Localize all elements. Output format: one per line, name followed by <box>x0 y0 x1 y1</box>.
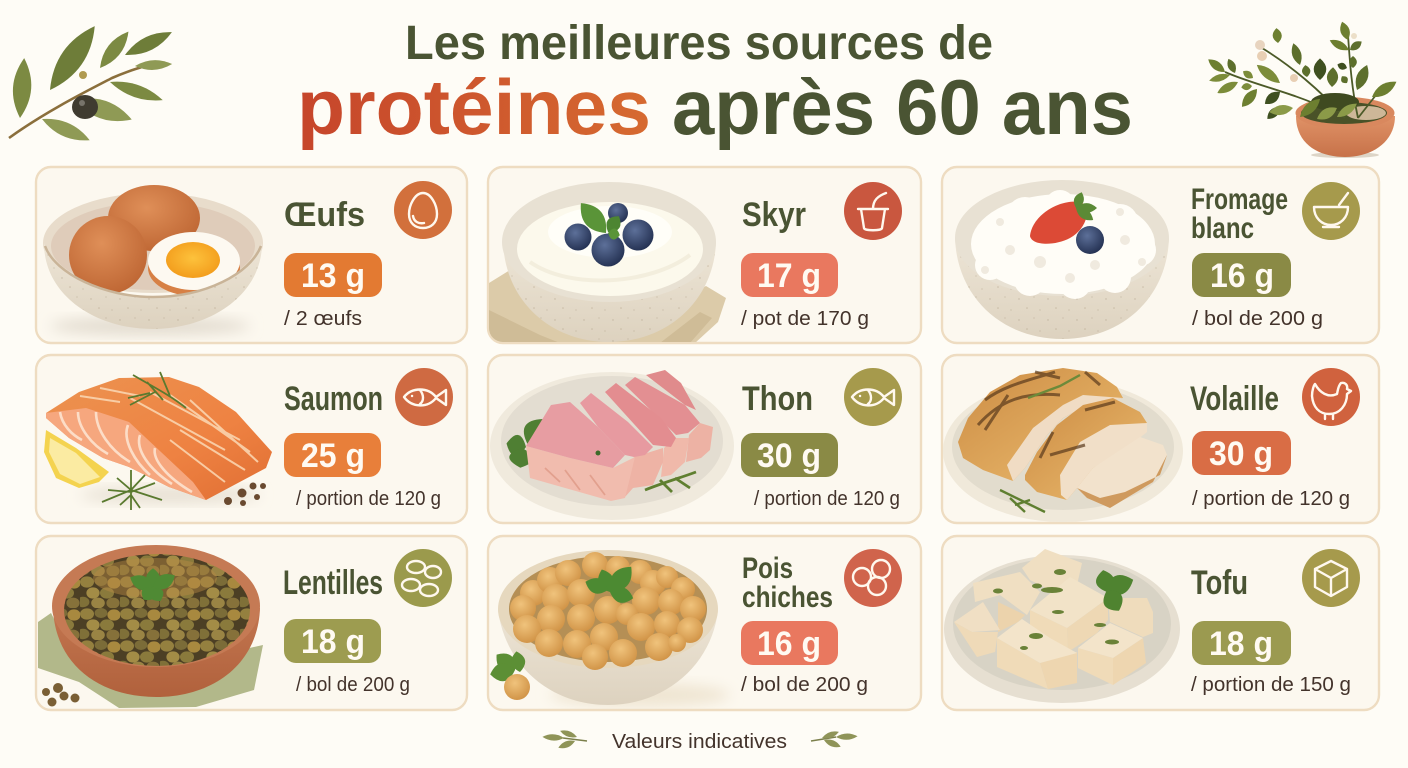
title <box>297 17 1133 151</box>
icon: right sprig <box>811 729 858 750</box>
icon: lentils <box>394 549 452 607</box>
icon: chickpeas <box>844 549 902 607</box>
icon: left sprig <box>542 728 587 751</box>
protein value <box>284 253 382 297</box>
name: blanc <box>1191 212 1254 245</box>
note text: Valeurs indicatives <box>612 731 787 753</box>
name: chiches <box>742 581 833 614</box>
protein value: 17 g <box>757 257 821 295</box>
panel: fromage blanc <box>942 167 1379 343</box>
icon: fish <box>844 368 902 426</box>
icon: bowl <box>1302 182 1360 240</box>
serving: / bol de 200 g <box>741 674 868 696</box>
panel: lentilles <box>36 536 467 710</box>
protein value: 13 g <box>301 257 365 295</box>
serving: / portion de 120 g <box>1192 488 1350 510</box>
icon: potted herb <box>1206 20 1399 158</box>
protein value: 30 g <box>757 437 821 475</box>
panel: thon <box>488 355 921 523</box>
protein value: 18 g <box>1209 625 1273 663</box>
protein value <box>1192 621 1291 665</box>
panel: skyr <box>488 167 921 343</box>
protein value: 16 g <box>1210 257 1274 295</box>
panel: pois chiches <box>488 536 921 710</box>
icon: fish <box>395 368 453 426</box>
protein value: 30 g <box>1209 435 1273 473</box>
parsley garnish <box>505 413 553 469</box>
protein value <box>741 433 838 477</box>
title word: protéines: protéines <box>297 63 651 151</box>
serving: / bol de 200 g <box>296 674 410 696</box>
protein value <box>284 619 381 663</box>
name: Pois <box>742 552 793 585</box>
protein value: 25 g <box>301 437 365 475</box>
name: Tofu <box>1191 564 1248 602</box>
icon: tofu cube <box>1302 549 1360 607</box>
illustration: eggs in bowl <box>43 185 263 335</box>
serving: / portion de 150 g <box>1191 674 1351 696</box>
name: Thon <box>742 380 813 418</box>
footer note <box>542 728 858 753</box>
protein value <box>1192 253 1291 297</box>
serving: / bol de 200 g <box>1192 308 1323 330</box>
protein value: 16 g <box>757 625 821 663</box>
title line 1: Les meilleures sources de <box>405 17 993 70</box>
serving: / pot de 170 g <box>741 308 869 330</box>
name <box>1191 183 1288 245</box>
protein value: 18 g <box>301 623 365 661</box>
illustration: tuna slices on plate <box>490 370 734 520</box>
protein value <box>741 253 838 297</box>
name: Lentilles <box>283 564 383 602</box>
protein value <box>741 621 838 665</box>
icon: hen <box>1302 368 1360 426</box>
illustration: tofu cubes on plate <box>944 549 1180 703</box>
icon: yogurt pot <box>844 182 902 240</box>
illustration: grilled chicken on plate <box>943 368 1183 522</box>
panel: tofu <box>942 536 1379 710</box>
serving: / portion de 120 g <box>754 488 900 510</box>
name: Fromage <box>1191 183 1288 216</box>
protein value <box>1192 431 1291 475</box>
icon: egg <box>394 181 452 239</box>
protein value <box>284 433 381 477</box>
illustration: fromage blanc bowl <box>955 180 1169 339</box>
name: Skyr <box>742 196 806 234</box>
panel: œufs <box>36 167 467 343</box>
title words: après 60 ans: après 60 ans <box>672 63 1133 151</box>
illustration: grilled salmon <box>44 372 272 510</box>
name: Saumon <box>284 380 383 418</box>
name <box>742 552 833 614</box>
serving: / 2 œufs <box>284 308 362 330</box>
serving: / portion de 120 g <box>296 488 441 510</box>
illustration: lentils in terracotta bowl <box>38 545 263 708</box>
panel: saumon <box>36 355 467 523</box>
icon: olive branch <box>9 20 175 147</box>
panel: volaille <box>942 355 1379 523</box>
name: Volaille <box>1190 380 1279 418</box>
illustration: chickpeas in bowl <box>489 550 730 707</box>
name: Œufs <box>284 196 365 234</box>
illustration: skyr bowl with blueberries <box>489 182 726 343</box>
